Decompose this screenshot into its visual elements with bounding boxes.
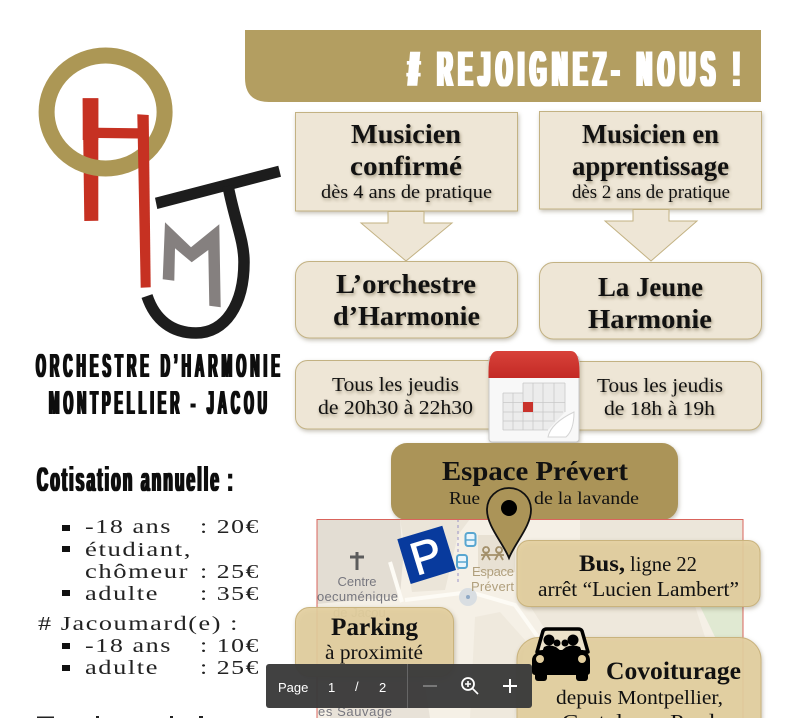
list: tarifs généraux: : 35€ <box>200 583 260 605</box>
map label: de Jacou: de Jacou <box>333 605 386 620</box>
panel: musicien confirmé: Musicien <box>351 119 461 149</box>
panel: horaires jeune harmonie: de 18h à 19h <box>604 398 715 420</box>
logo: OHMJ monogram <box>47 56 281 333</box>
panel: covoiturage: Covoiturage <box>606 658 741 685</box>
panel: bus: Bus, <box>579 551 625 576</box>
list: tarifs généraux: : 25€ <box>200 561 260 583</box>
pdf viewer toolbar <box>266 664 532 708</box>
panel: horaires jeune harmonie <box>560 362 762 430</box>
icon: bus stop <box>466 533 476 546</box>
list: tarifs jacoumards: : 25€ <box>200 657 260 679</box>
panel: covoiturage <box>517 638 761 718</box>
panel: horaires jeune harmonie: Tous les jeudis <box>597 375 723 397</box>
icon: carpool car <box>532 629 590 681</box>
panel: covoiturage: depuis Montpellier, <box>556 687 723 709</box>
map frame <box>317 520 743 718</box>
list: tarifs généraux: chômeur <box>85 561 189 583</box>
panel: musicien en apprentissage: Musicien en <box>582 119 719 149</box>
pdf viewer toolbar: 2 <box>379 680 386 695</box>
pdf viewer toolbar: 1 <box>328 680 335 695</box>
panel: orchestre d'harmonie <box>296 262 518 338</box>
panel: parking: Parking <box>331 614 419 641</box>
panel: bus: ligne 22 <box>630 552 697 576</box>
panel: espace prévert <box>391 443 678 520</box>
panel: musicien en apprentissage: dès 2 ans de pratique <box>572 182 730 203</box>
panel: bus: arrêt “Lucien Lambert” <box>538 577 739 601</box>
list: tarifs généraux: : 20€ <box>200 516 260 538</box>
panel: parking <box>296 608 454 676</box>
list: tarifs jacoumards: # Jacoumard(e) : <box>38 613 239 635</box>
map label: prévert: Prévert <box>471 579 514 594</box>
icon: map cross <box>350 552 364 570</box>
panel: la jeune harmonie: Harmonie <box>588 304 712 334</box>
panel: orchestre d'harmonie: d’Harmonie <box>333 301 480 331</box>
panel: orchestre d'harmonie: L’orchestre <box>336 269 476 299</box>
list: tarifs généraux: adulte <box>85 583 159 605</box>
panel: bus <box>517 540 760 606</box>
icon: parking sign: P <box>404 527 449 585</box>
list: tarifs jacoumards: -18 ans <box>85 635 172 657</box>
text: Cotisation annuelle : <box>37 461 235 499</box>
cropped heading at page bottom <box>37 716 203 718</box>
panel: musicien confirmé <box>296 112 518 211</box>
arrow: apprentissage to jeune harmonie <box>605 210 697 261</box>
pdf viewer toolbar: / <box>355 679 359 694</box>
panel: horaires orchestre <box>296 360 506 429</box>
list: tarifs jacoumards <box>38 613 260 679</box>
panel: espace prévert: Espace Prévert <box>442 456 628 486</box>
icon: location pin <box>487 488 531 558</box>
list: tarifs généraux: -18 ans <box>85 516 172 538</box>
icon: bus stop second <box>457 555 467 568</box>
panel: horaires orchestre: de 20h30 à 22h30 <box>318 397 473 419</box>
list: tarifs généraux <box>62 516 260 605</box>
panel: espace prévert: de la lavande <box>534 488 639 508</box>
orchestra name <box>36 347 284 421</box>
icon: calendar <box>488 351 580 442</box>
list: tarifs jacoumards: : 10€ <box>200 635 260 657</box>
text: ORCHESTRE D’HARMONIE <box>36 347 284 384</box>
list: tarifs jacoumards: adulte <box>85 657 159 679</box>
panel: musicien en apprentissage: apprentissage <box>572 151 729 181</box>
panel: parking: à proximité <box>325 642 423 664</box>
arrow: confirmé to orchestre <box>361 212 452 261</box>
panel: musicien confirmé: confirmé <box>350 151 462 181</box>
panel: musicien en apprentissage <box>540 112 762 209</box>
map label: espace: Espace <box>472 564 514 579</box>
panel: la jeune harmonie <box>540 262 762 339</box>
banner: rejoignez-nous <box>245 30 761 102</box>
map label: oecuménique: oecuménique <box>317 589 398 604</box>
text: MONTPELLIER - JACOU <box>49 384 271 421</box>
map of the neighbourhood <box>317 519 743 718</box>
list: tarifs généraux: étudiant, <box>85 539 192 561</box>
panel: musicien confirmé: dès 4 ans de pratique <box>321 182 492 203</box>
icon: people <box>481 547 504 560</box>
map label: centre oecuménique: Centre <box>337 574 377 589</box>
pdf viewer toolbar: Page <box>278 680 308 695</box>
panel: la jeune harmonie: La Jeune <box>598 272 703 302</box>
panel: espace prévert: Rue <box>449 488 480 508</box>
panel: horaires orchestre: Tous les jeudis <box>332 374 459 396</box>
